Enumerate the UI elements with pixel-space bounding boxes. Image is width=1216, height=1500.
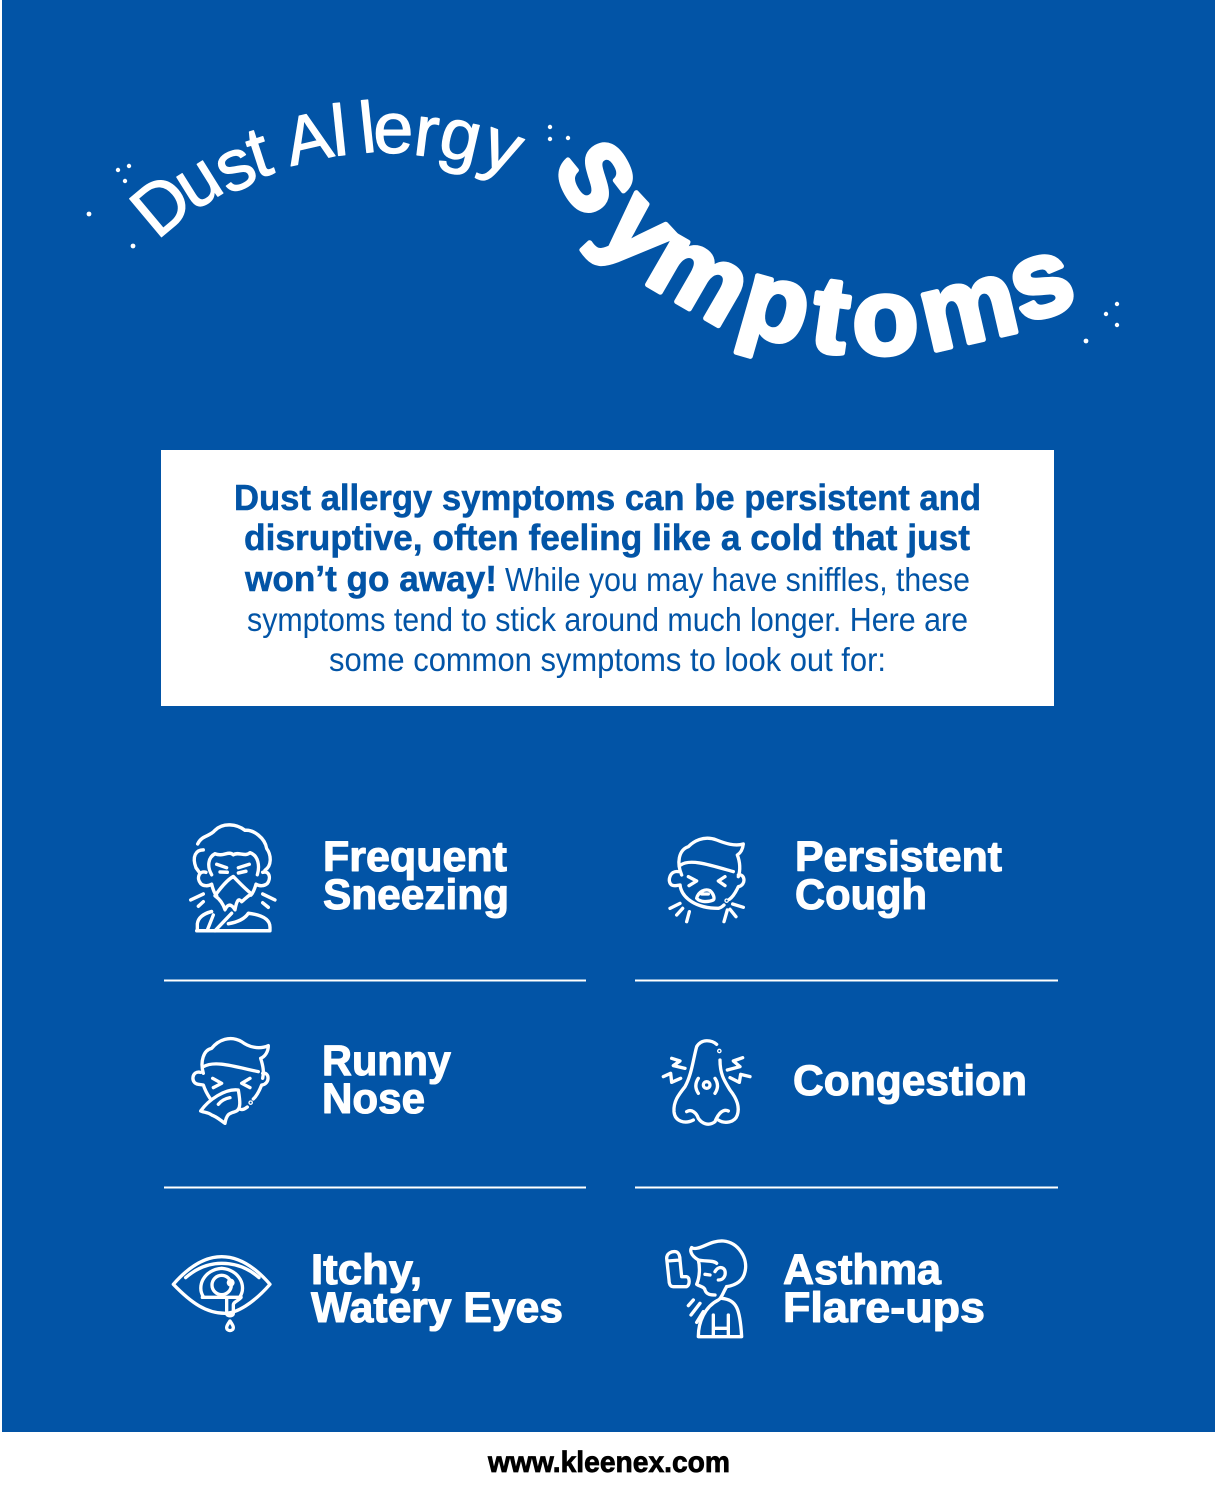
intro bold line 3: won’t go away! — [244, 558, 497, 599]
heading: Itchy, Watery Eyes: Itchy, — [311, 1246, 422, 1294]
heading: Asthma Flare-ups — [783, 1246, 985, 1332]
heading: Persistent Cough — [795, 833, 1002, 919]
heading: Asthma Flare-ups: Asthma — [783, 1246, 942, 1294]
heading: Frequent Sneezing — [323, 833, 509, 919]
intro bold line 2: disruptive, often feeling like a cold that just — [244, 517, 970, 558]
heading: Asthma Flare-ups: Flare-ups — [783, 1284, 985, 1332]
heading: Itchy, Watery Eyes — [311, 1246, 563, 1332]
heading: Itchy, Watery Eyes: Watery Eyes — [311, 1284, 563, 1332]
intro regular line 4: symptoms tend to stick around much longer. Here are — [247, 601, 968, 638]
heading: Congestion: Congestion — [793, 1057, 1027, 1105]
icon: frequent sneezing — [191, 825, 275, 931]
title: Dust Allergy: Dust Allergy — [116, 88, 534, 253]
heading: Runny Nose — [322, 1037, 451, 1123]
icon: congestion — [663, 1041, 750, 1124]
intro bold line 1: Dust allergy symptoms can be persistent and — [234, 477, 981, 518]
heading: Frequent Sneezing: Frequent — [323, 833, 507, 881]
icon: asthma inhaler — [667, 1241, 746, 1337]
icon: persistent cough — [669, 838, 744, 922]
heading: Frequent Sneezing: Sneezing — [323, 871, 509, 919]
heading: Persistent Cough: Persistent — [795, 833, 1002, 881]
title: Symptoms: Symptoms — [535, 124, 1086, 378]
heading: Runny Nose: Nose — [322, 1075, 425, 1123]
heading: Runny Nose: Runny — [322, 1037, 451, 1085]
heading: Persistent Cough: Cough — [795, 871, 927, 919]
footer: website url: www.kleenex.com — [487, 1446, 730, 1479]
intro regular line 5: some common symptoms to look out for: — [329, 641, 886, 678]
panel: intro text box — [161, 450, 1054, 706]
decorative sparkle dots — [87, 125, 1119, 343]
icon: itchy watery eye — [173, 1257, 270, 1331]
icon: runny nose — [193, 1039, 268, 1123]
intro regular line 3: While you may have sniffles, these — [505, 561, 970, 598]
